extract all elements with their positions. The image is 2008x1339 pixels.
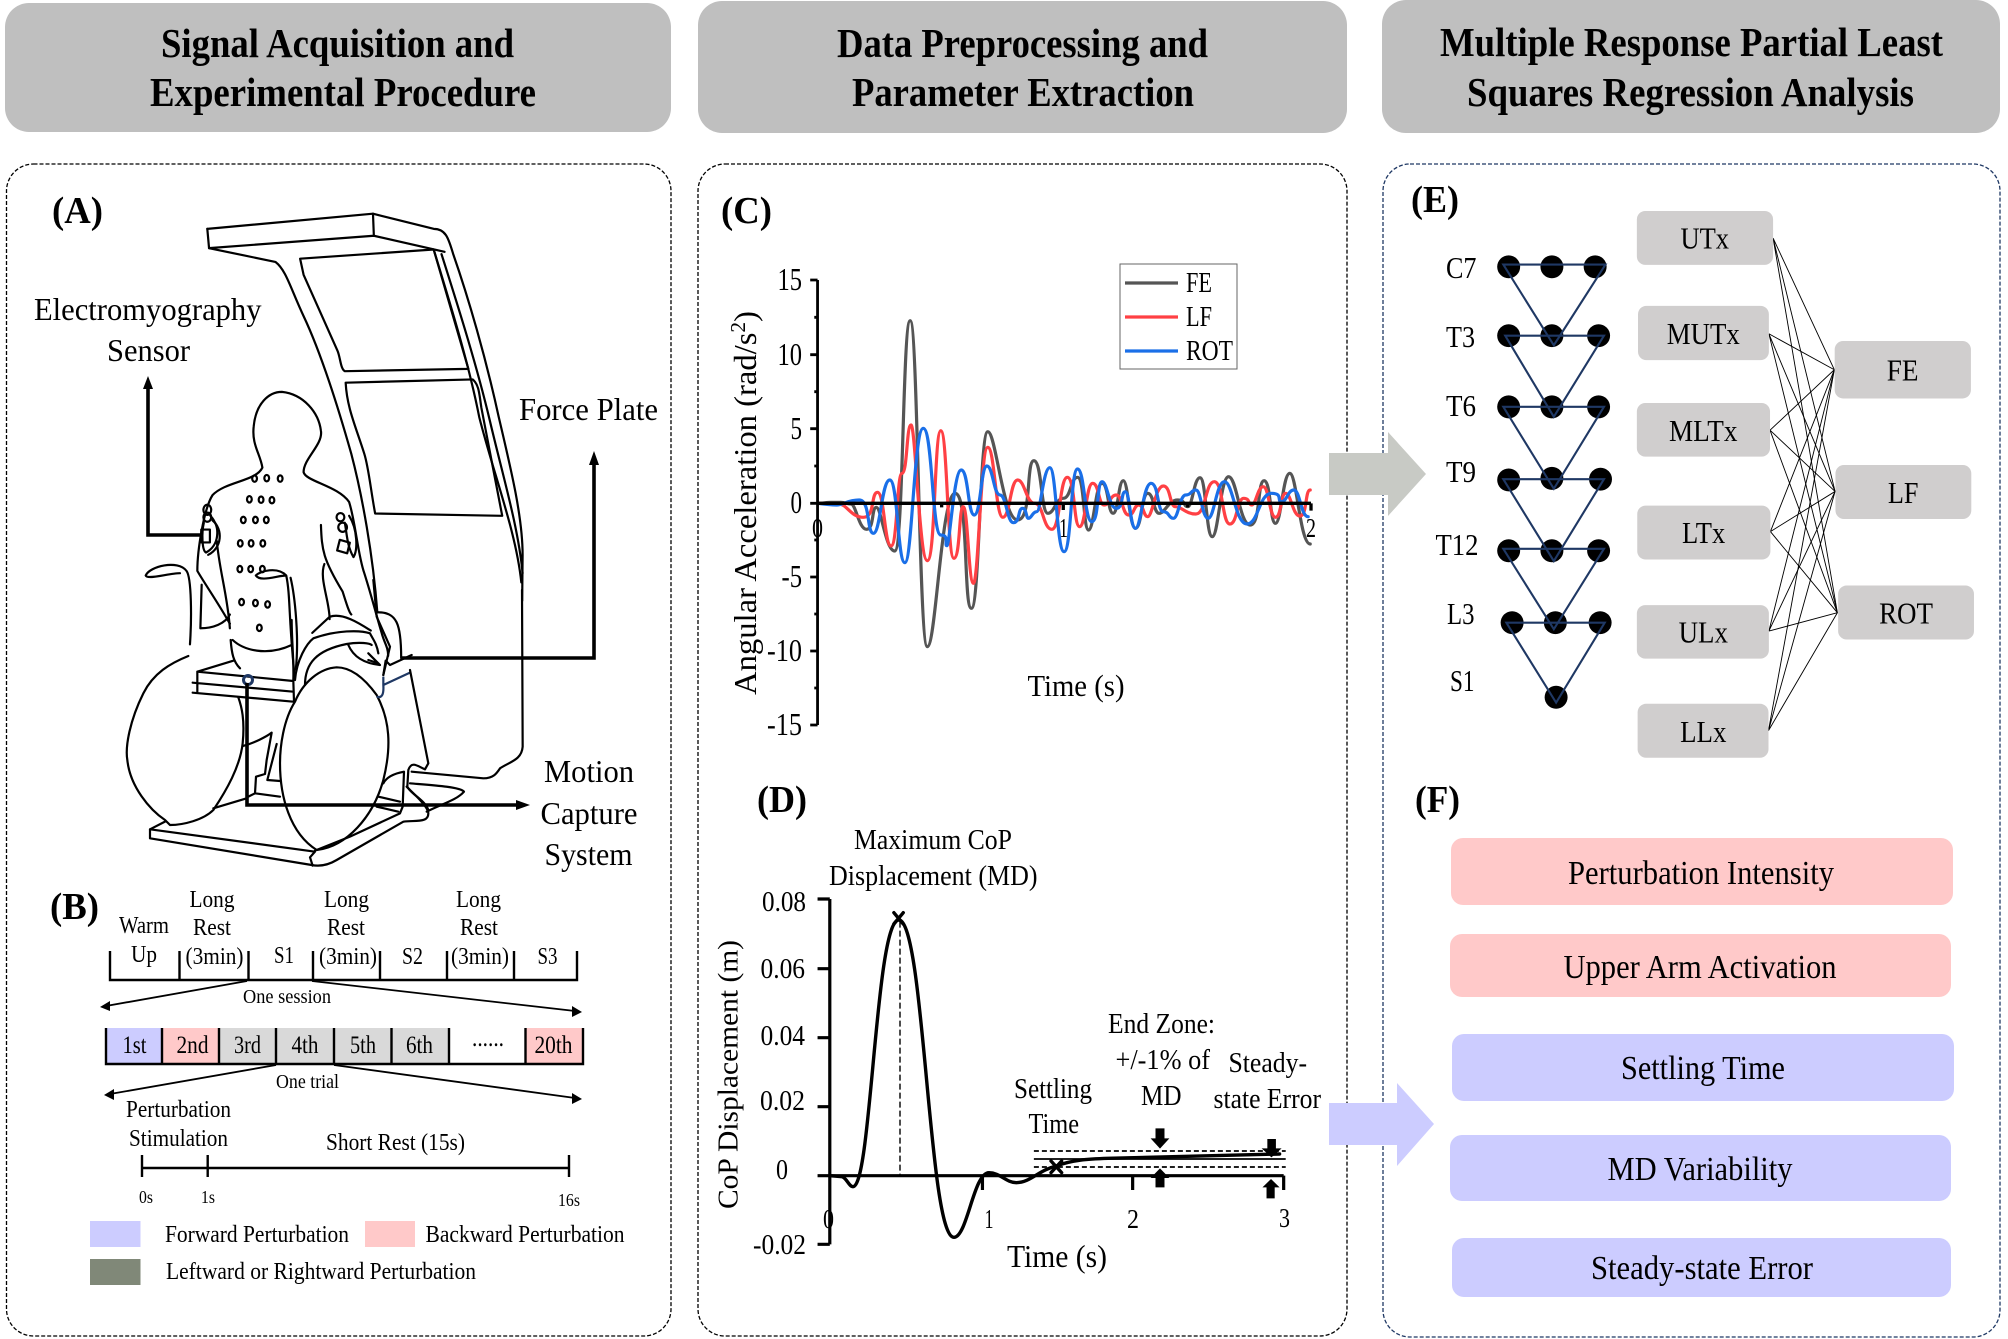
single trial timeline: Perturbation [126, 1097, 231, 1123]
maximum displacement dashed guide [899, 922, 901, 1176]
trial sequence row: 5th [350, 1032, 376, 1059]
session segment labels: Up [131, 942, 157, 968]
single trial timeline: Stimulation [129, 1126, 228, 1152]
right leg, footplate and frame base [373, 580, 523, 812]
measure: steady-state error: Steady-state Error [1591, 1250, 1814, 1287]
session segment labels: Warm [119, 913, 169, 939]
spine level labels: T6 [1446, 388, 1476, 423]
y axis tick labels: 0.06 [760, 954, 805, 985]
measure: MD variability: MD Variability [1608, 1151, 1792, 1188]
trial sequence row: 4th [292, 1032, 319, 1059]
legend: perturbation directions: Forward Perturbation [165, 1222, 349, 1248]
segment variable boxes: UTx [1680, 220, 1730, 255]
trial sequence row: 3rd [234, 1032, 261, 1059]
annotation: end zone: End Zone: [1108, 1009, 1215, 1040]
panel label A: (A) [52, 190, 103, 232]
x axis title: Time (s) [1007, 1238, 1107, 1274]
legend: perturbation directions: Backward Perturbation [426, 1222, 624, 1248]
y axis tick labels: -0.02 [753, 1230, 806, 1261]
y axis label: Angular Acceleration (rad/s [727, 340, 763, 695]
y axis tick labels [753, 887, 806, 1261]
y axis tick labels: 0.08 [762, 887, 806, 918]
arrow: motion capture system [247, 683, 530, 810]
annotation: end zone: MD [1141, 1081, 1182, 1112]
measure: steady-state error [1452, 1238, 1951, 1297]
label: motion capture system [540, 753, 638, 872]
session segment labels: Long [456, 887, 501, 913]
frame, upper body and sensors [146, 214, 523, 679]
x axis tick labels: 1 [1059, 513, 1068, 543]
factor: upper arm activation [1450, 934, 1951, 997]
segment triangles [1503, 265, 1605, 703]
x axis tick labels: 0 [823, 1204, 834, 1234]
trial sequence row [106, 1025, 583, 1064]
motion direction boxes: LF [1888, 475, 1918, 510]
label: electromyography sensor [34, 291, 262, 368]
session segment labels: Long [324, 887, 369, 913]
y axis tick labels: 0 [776, 1155, 788, 1186]
annotation: settling time: Settling [1014, 1074, 1092, 1105]
factor: perturbation intensity [1451, 838, 1953, 905]
x axis title: Time (s) [1028, 668, 1124, 703]
expansion arrows: one trial: One trial [276, 1071, 339, 1093]
single trial timeline: 0s [139, 1187, 153, 1207]
series ROT [818, 428, 1308, 563]
arrow: electromyography sensor [143, 376, 203, 535]
curve, axes and end zone [818, 899, 1286, 1244]
factor: perturbation intensity: Perturbation Intensity [1568, 855, 1834, 892]
annotation: settling time: Time [1028, 1109, 1079, 1140]
trial sequence row: 1st [122, 1032, 147, 1059]
trial sequence row: 6th [406, 1032, 433, 1059]
label: motion capture system: Motion [544, 753, 634, 789]
y axis tick labels: -10 [767, 632, 802, 668]
series FE [818, 321, 1310, 647]
marker dots [1497, 255, 1612, 709]
panel: regression analysis (E and F) [1383, 164, 2000, 1337]
expansion arrows: one session [100, 981, 582, 1017]
segment variable boxes: LLx [1680, 714, 1727, 749]
force plate sensor marker [244, 676, 252, 684]
motion direction boxes: FE [1887, 352, 1918, 387]
spine level labels: T9 [1446, 454, 1476, 489]
header: multiple response partial least squares regression analysis: Multiple Response Partial Least [1440, 19, 1943, 65]
x axis tick labels [823, 1203, 1290, 1234]
y axis tick labels: 0 [790, 484, 802, 520]
spine level labels [1436, 250, 1478, 698]
measure: MD variability [1450, 1135, 1951, 1201]
line chart: CoP displacement [712, 825, 1322, 1274]
header: multiple response partial least squares regression analysis: Squares Regression Analysis [1467, 69, 1914, 115]
lower chair, seat and leg outlines [127, 620, 428, 866]
end zone lines [1034, 1151, 1286, 1167]
session timeline [110, 887, 577, 980]
header: data preprocessing and parameter extraction: Parameter Extraction [852, 69, 1194, 115]
y axis label: ) [727, 311, 763, 322]
header: multiple response partial least squares regression analysis [1382, 0, 2000, 133]
CoP curve [830, 920, 1280, 1237]
header: data preprocessing and parameter extraction: Data Preprocessing and [837, 20, 1208, 66]
session segment labels: Rest [193, 915, 231, 941]
header: data preprocessing and parameter extraction [698, 1, 1347, 133]
y axis tick labels: 10 [778, 336, 802, 372]
panel label F: (F) [1415, 779, 1460, 821]
annotation: end zone: +/-1% of [1116, 1045, 1211, 1076]
segment variable boxes: MLTx [1669, 413, 1738, 448]
x axis tick labels: 1 [984, 1204, 994, 1234]
y axis tick labels: -5 [782, 558, 802, 594]
illustration: seated participant in perturbation frame [127, 214, 523, 866]
measure: settling time: Settling Time [1621, 1050, 1785, 1087]
trial sequence row: 20th [534, 1032, 573, 1059]
expansion arrows: one trial [104, 1065, 582, 1104]
panel label B: (B) [50, 886, 99, 928]
y axis tick labels: 15 [778, 261, 802, 297]
motion direction boxes: ROT [1879, 595, 1933, 630]
panel: data preprocessing (C and D) [698, 164, 1347, 1336]
motion direction boxes [1835, 341, 1974, 640]
back marker dots [237, 475, 283, 631]
y axis tick labels [767, 261, 802, 742]
x axis tick labels [812, 513, 1316, 543]
segment variable boxes: LTx [1682, 515, 1726, 550]
label: motion capture system: Capture [540, 795, 638, 831]
session segment labels: Rest [327, 915, 365, 941]
spine marker and segment diagram [1497, 211, 1974, 758]
panel label D: (D) [757, 779, 807, 821]
markers [894, 913, 1062, 1173]
annotation: maximum CoP displacement: Displacement (MD) [829, 861, 1038, 892]
session segment labels: (3min) [319, 944, 377, 970]
segment variable boxes [1637, 211, 1773, 758]
label: electromyography sensor: Electromyography [34, 291, 262, 327]
connection lines between segment and motion variables [1768, 238, 1837, 731]
annotation: maximum CoP displacement: Maximum CoP [854, 825, 1012, 856]
panel label E: (E) [1411, 179, 1459, 221]
session bracket [110, 951, 577, 980]
header: signal acquisition and experimental procedure: Experimental Procedure [150, 69, 536, 115]
left arm EMG sensors [201, 505, 220, 555]
single trial timeline: 16s [558, 1190, 580, 1210]
legend: perturbation directions [90, 1221, 624, 1285]
panel: signal acquisition (A and B) [6, 164, 671, 1336]
axes and ticks [818, 899, 1284, 1244]
header: signal acquisition and experimental procedure [5, 3, 671, 132]
annotation: steady-state error: state Error [1214, 1084, 1322, 1115]
spine level labels: C7 [1446, 250, 1476, 285]
session segment labels: Long [190, 887, 234, 913]
segment variable boxes: ULx [1679, 615, 1728, 650]
header: signal acquisition and experimental procedure: Signal Acquisition and [161, 20, 514, 66]
annotation: steady-state error: Steady- [1228, 1048, 1307, 1079]
spine level labels: S1 [1450, 663, 1474, 698]
y axis label: CoP Displacement (m) [712, 940, 744, 1209]
x axis tick labels: 3 [1279, 1203, 1290, 1233]
factor: upper arm activation: Upper Arm Activation [1564, 949, 1836, 986]
label: force plate: Force Plate [519, 391, 658, 427]
y axis tick labels: 5 [790, 410, 802, 446]
y axis label: 2 [726, 322, 750, 333]
annotation: maximum CoP displacement [829, 825, 1038, 892]
arrow: from parameters to regression factors [1329, 1083, 1434, 1166]
x axis tick labels: 0 [812, 513, 823, 543]
annotation: settling time [1014, 1074, 1092, 1140]
session segment labels: S2 [402, 944, 423, 970]
session segment labels: S1 [274, 943, 294, 969]
line chart: angular acceleration [726, 261, 1316, 742]
single trial timeline: 1s [201, 1187, 215, 1207]
y axis tick labels: -15 [767, 706, 802, 742]
chart legend: LF [1186, 301, 1212, 333]
annotation: steady-state error [1214, 1048, 1322, 1115]
end zone arrows [1151, 1128, 1282, 1198]
arrow: force plate [401, 451, 599, 658]
session segment labels: S3 [538, 944, 558, 970]
x axis tick labels: 2 [1127, 1204, 1139, 1234]
y axis tick labels: 0.02 [760, 1086, 805, 1117]
chart legend: ROT [1186, 335, 1233, 367]
trial sequence row: 2nd [176, 1032, 209, 1059]
spine level labels: L3 [1447, 596, 1474, 631]
single trial timeline [126, 1097, 580, 1210]
y axis tick labels: 0.04 [760, 1021, 805, 1052]
label: electromyography sensor: Sensor [107, 332, 190, 368]
session segment labels: (3min) [451, 944, 509, 970]
session segment labels: Rest [460, 915, 498, 941]
panel label C: (C) [721, 190, 772, 232]
expansion arrows: one session: One session [243, 986, 331, 1008]
series and axes [810, 280, 1311, 725]
session segment labels [119, 887, 558, 970]
measure: settling time [1452, 1034, 1954, 1101]
trial sequence row: ...... [472, 1025, 504, 1052]
arrow: from preprocessing to spine model [1329, 432, 1426, 516]
spine level labels: T12 [1436, 527, 1478, 562]
session segment labels: (3min) [186, 944, 244, 970]
blue strap [377, 673, 410, 697]
x axis tick labels: 2 [1306, 513, 1316, 543]
chart legend: FE [1186, 267, 1212, 299]
label: motion capture system: System [544, 836, 633, 872]
annotation: end zone [1108, 1009, 1215, 1112]
segment variable boxes: MUTx [1667, 316, 1740, 351]
legend: perturbation directions: Leftward or Rightward Perturbation [166, 1259, 476, 1285]
series LF [818, 425, 1310, 583]
chart legend [1120, 264, 1237, 369]
spine level labels: T3 [1446, 319, 1475, 354]
right arm EMG sensors [337, 513, 356, 557]
axes and ticks [810, 280, 818, 725]
single trial timeline: Short Rest (15s) [326, 1130, 465, 1156]
